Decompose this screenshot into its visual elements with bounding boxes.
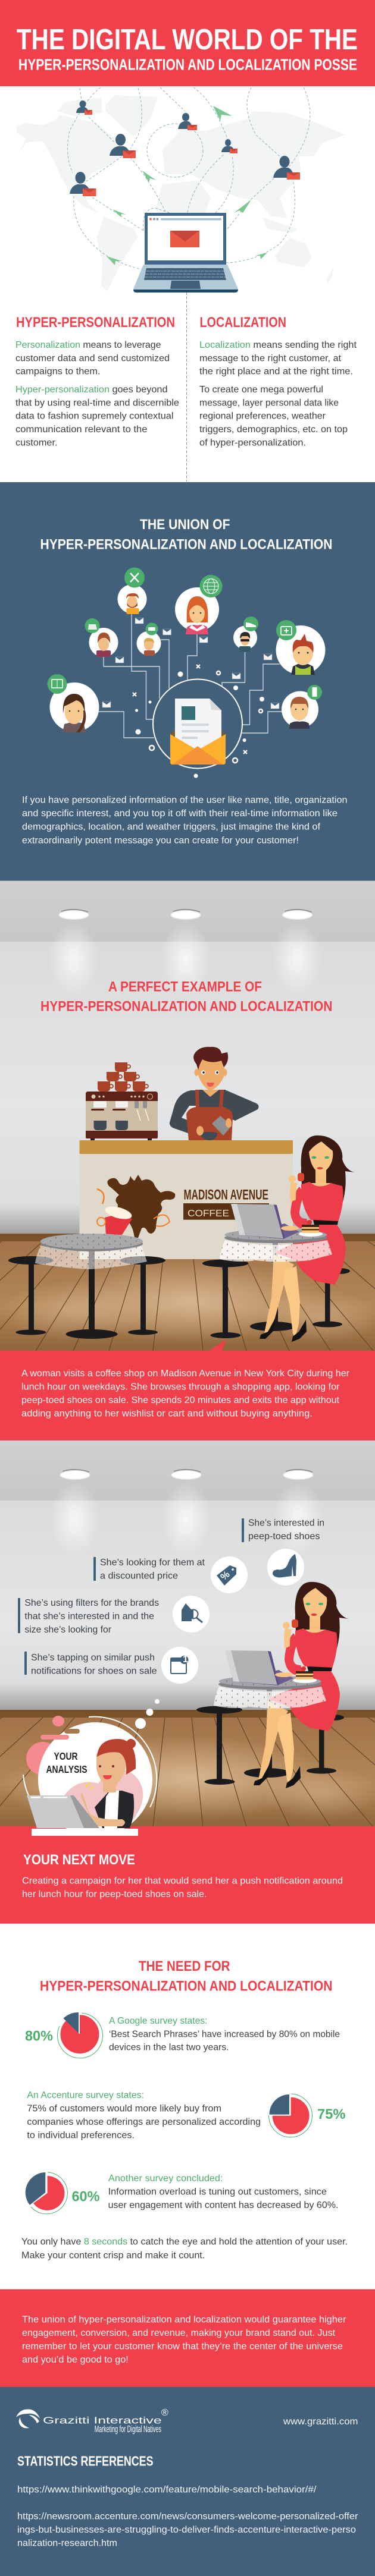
conclusion text: The union of hyper-personalization and localization would guarantee higher (22, 2315, 346, 2325)
definition text: campaigns to them. (15, 367, 100, 377)
stat: 60% (26, 2172, 339, 2214)
definition text (15, 340, 179, 448)
eight seconds note: Make your content crisp and make it count. (21, 2250, 205, 2260)
definition text: To create one mega powerful (199, 385, 323, 395)
divider: dashed vertical (186, 292, 187, 482)
text: Creating a campaign for her that would send her a push notification around (22, 1876, 343, 1886)
references heading: STATISTICS REFERENCES (17, 2453, 154, 2468)
stat: 75% (27, 2090, 346, 2140)
conclusion text: engagement, conversion, and revenue, making your brand stand out. Just (22, 2328, 336, 2338)
analysis label: YOUR (54, 1750, 78, 1762)
woman at table with laptop (202, 1136, 355, 1342)
world map background (17, 95, 345, 291)
pie chart 80% (58, 2012, 103, 2058)
avatar: bearded man with tools (118, 567, 146, 614)
story text: A woman visits a coffee shop on Madison Avenue in New York City during her (21, 1369, 350, 1379)
insight: peep-toed shoes (242, 1518, 324, 1542)
insight: brand filters: size she’s looking for (24, 1625, 112, 1635)
avatar: man with sunglasses and shoe (233, 617, 258, 652)
pie chart 75% (268, 2094, 312, 2137)
heading (40, 1958, 332, 1994)
eight seconds note (21, 2237, 348, 2260)
world map illustration (17, 87, 345, 292)
logo: Grazitti Interactive: Marketing for Digital Natives (95, 2424, 161, 2435)
logo: Grazitti Interactive: Grazitti Interactive (43, 2416, 162, 2426)
paragraph: If you have personalized information of the user like name, title, organization (22, 795, 348, 806)
stat: 60%: Information overload is tuning out customers, since (108, 2187, 327, 2197)
stat: 75%: An Accenture survey states: (27, 2090, 144, 2100)
stat: 80%: ‘Best Search Phrases’ have increased by 80% on mobile (109, 2029, 340, 2039)
heading: THE NEED FOR (139, 1958, 230, 1974)
definition text: triggers, demographics, etc. on top (199, 424, 348, 435)
logo: Grazitti Interactive: ® (161, 2408, 168, 2418)
panel: the need (21, 1958, 348, 2260)
insight: brand filters: that she’s interested in and the (24, 1612, 154, 1622)
shop logo: MADISON AVENUE (183, 1187, 268, 1203)
wood floor (0, 1234, 375, 1351)
heading: LOCALIZATION (200, 314, 286, 331)
stat: 80%: devices in the last two years. (109, 2043, 229, 2053)
panel: localization (199, 314, 357, 448)
heading: HYPER-PERSONALIZATION AND LOCALIZATION (40, 999, 332, 1015)
definition text: data to fashion supremely contextual (15, 411, 174, 422)
definition text: message to the right customer, at (199, 353, 342, 363)
stat: 75%: 75% of customers would more likely buy from (27, 2103, 221, 2113)
eight seconds note: You only have 8 seconds to catch the eye and hold the attention of your user. (21, 2237, 348, 2247)
insight: discounted price: She’s looking for them at (100, 1558, 205, 1568)
paragraph: and specific interest, and you top it off with their real-time information like (22, 809, 338, 819)
wood floor (0, 1710, 375, 1827)
definition text: Personalization means to leverage (15, 340, 161, 350)
definition text: customer data and send customized (15, 353, 170, 363)
coffee counter (80, 1140, 293, 1259)
text (22, 1876, 343, 1899)
analyst laptop (27, 1795, 99, 1828)
paragraph: extraordinarily potent message you can create for your customer! (22, 835, 299, 845)
panel: header (0, 0, 375, 86)
website: www.grazitti.com (283, 2417, 358, 2427)
definition text: of hyper-personalization. (199, 438, 306, 448)
icon: notification: 1 (183, 1655, 188, 1665)
definition text: the right place and at the right time. (199, 367, 353, 377)
conclusion text: remember to let your customer know that they’re the center of the universe (22, 2342, 343, 2352)
stat: 60%: 60% (71, 2188, 100, 2204)
mini envelopes (102, 618, 279, 709)
story text (21, 1369, 350, 1419)
stat: 75%: 75% (317, 2106, 346, 2122)
shop logo: COFFEE (188, 1209, 229, 1219)
panel: conclusion (0, 2289, 375, 2387)
central circle (153, 679, 242, 768)
dashed routes (67, 87, 310, 269)
avatar: blond man with car (137, 623, 161, 656)
definition text: Hyper-personalization goes beyond (15, 385, 168, 395)
icon: discount tag: % (219, 1569, 232, 1583)
woman at table with laptop (196, 1582, 349, 1788)
insight: peep-toed shoes: peep-toed shoes (248, 1531, 320, 1542)
references: nalization-research.htm (17, 2538, 117, 2548)
avatar: spiky-haired man with medical kit (276, 620, 325, 675)
barista (170, 1047, 259, 1141)
story text: lunch hour on weekdays. She browses through a shopping app, looking for (21, 1382, 340, 1392)
avatar: red-haired woman with globe (175, 575, 223, 634)
references: ings-but-businesses-are-struggling-to-deliver-finds-accenture-interactive-perso (17, 2525, 356, 2535)
coffee machine with cups (86, 1062, 158, 1141)
references: https://www.thinkwithgoogle.com/feature/mobile-search-behavior/#/ (17, 2484, 317, 2495)
heading (40, 979, 332, 1015)
laptop with email (133, 213, 238, 292)
stat: 80%: 80% (25, 2028, 53, 2045)
references: https://newsroom.accenture.com/news/consumers-welcome-personalized-offer (17, 2511, 358, 2521)
icon: shoe (267, 1549, 304, 1586)
definition text: customer. (15, 438, 57, 448)
icon: discount tag (211, 1556, 248, 1593)
people with envelopes (70, 100, 294, 194)
stat: 60%: user engagement with content has decreased by 60%. (108, 2200, 338, 2210)
definition text: that by using real-time and discernible (15, 398, 179, 408)
analyst woman (80, 1739, 136, 1828)
insight: brand filters: She’s using filters for the brands (24, 1598, 159, 1608)
decorative dots (135, 672, 264, 778)
insight: discounted price (93, 1557, 205, 1581)
callout pointer (210, 1339, 226, 1351)
insight: brand filters (18, 1598, 159, 1635)
insight: push notifications: notifications for shoes on sale (31, 1666, 157, 1677)
avatar: man with phone (282, 685, 322, 729)
your analysis character (23, 1699, 160, 1836)
heading: A PERFECT EXAMPLE OF (108, 979, 262, 995)
panel: footer (0, 2387, 375, 2576)
text: her lunch hour for peep-toed shoes on sale. (22, 1889, 207, 1899)
stat: 80% (25, 2012, 340, 2058)
stools and left table (8, 1234, 165, 1339)
heading: HYPER-PERSONALIZATION AND LOCALIZATION (40, 536, 332, 552)
panel: coffee shop scene (0, 881, 375, 1351)
conclusion text: and you’d be good to go! (22, 2355, 129, 2365)
panel: hyper-personalization (15, 314, 179, 448)
paragraph (22, 795, 348, 845)
panel: analysis scene (0, 1440, 375, 1827)
avatar: woman with bag (85, 618, 118, 657)
document and envelope (170, 699, 226, 765)
definition text (199, 340, 357, 448)
insight: push notifications: She’s tapping on similar push (31, 1653, 155, 1663)
definition text: communication relevant to the (15, 424, 148, 435)
panel: woman's story (0, 1339, 375, 1440)
logo: Grazitti Interactive (16, 2408, 168, 2435)
conclusion text (22, 2315, 346, 2365)
definition text: Localization means sending the right (199, 340, 357, 350)
stat: 80%: A Google survey states: (109, 2016, 207, 2026)
desk (32, 1829, 138, 1836)
stat: 75%: companies whose offerings are personalized according (27, 2117, 261, 2127)
paper planes (107, 106, 267, 265)
your analysis character: ANALYSIS (46, 1763, 87, 1775)
shop logo (97, 1175, 269, 1238)
story text: peep-toed shoes on sale. She spends 20 minutes and exits the app without (21, 1395, 340, 1405)
heading: HYPER-PERSONALIZATION (16, 314, 175, 331)
network diagram (48, 567, 325, 778)
insight: push notifications (24, 1652, 157, 1677)
pie chart 60% (26, 2172, 67, 2214)
definition text: regional preferences, weather (199, 411, 326, 422)
insight: peep-toed shoes: She’s interested in (248, 1518, 324, 1528)
story text: adding anything to her wishlist or cart and without buying anything. (21, 1409, 312, 1419)
connector lines (99, 614, 282, 738)
panel: your next move (0, 1826, 375, 1924)
references (17, 2484, 358, 2548)
heading: HYPER-PERSONALIZATION AND LOCALIZATION (40, 1978, 332, 1994)
stat: 60%: Another survey concluded: (108, 2174, 223, 2184)
heading (40, 517, 332, 552)
panel: the union (0, 482, 375, 881)
ceiling lamps (50, 1470, 323, 1556)
insight: discounted price: a discounted price (100, 1571, 178, 1581)
avatar: woman with book (48, 674, 99, 732)
heading: THE UNION OF (140, 517, 230, 533)
paragraph: demographics, location, and weather triggers, just imagine the kind of (22, 822, 321, 832)
heading: YOUR NEXT MOVE (23, 1852, 135, 1868)
icon: tag search (173, 1596, 210, 1633)
definition text: message, layer personal data like (199, 398, 339, 408)
icon: notification (161, 1647, 198, 1684)
stat: 75%: to individual preferences. (27, 2130, 135, 2140)
ceiling lamps (49, 910, 323, 996)
